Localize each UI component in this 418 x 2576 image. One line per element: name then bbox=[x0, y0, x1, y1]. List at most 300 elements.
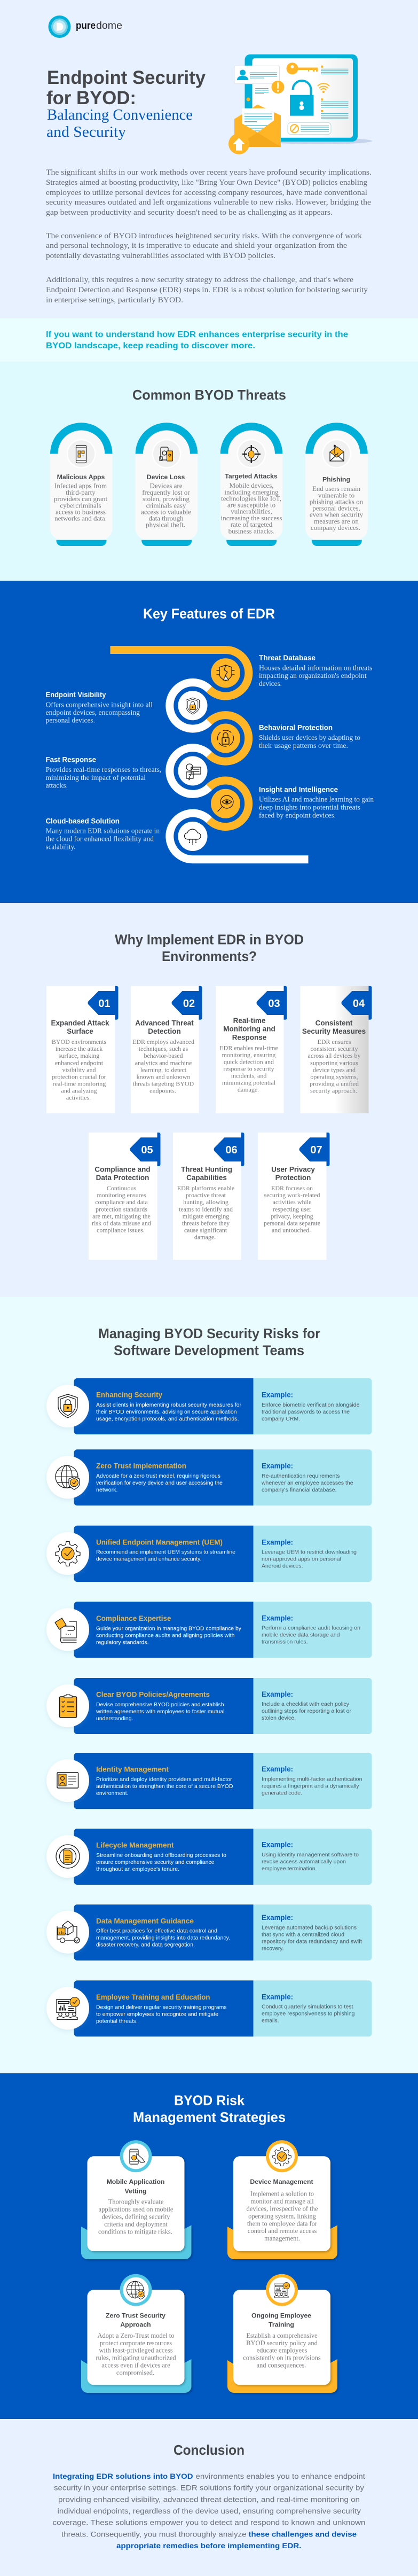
row: employee training and education: to empower employees to recognize and mitigate bbox=[96, 2011, 218, 2017]
card 05 bbox=[89, 1133, 160, 1260]
icon: response chat: ? bbox=[188, 774, 192, 779]
card: device loss: Devices are bbox=[149, 482, 183, 490]
icon: bug shield bbox=[211, 658, 240, 688]
card: device management: Implement a solution to bbox=[250, 2190, 314, 2197]
card 03: Real-time bbox=[233, 1017, 266, 1025]
heading: Managing BYOD Security Risks for bbox=[98, 1325, 320, 1341]
heading: Why Implement EDR in BYOD bbox=[115, 932, 304, 948]
intro paragraph 1: security measures outdated and left organizations vulnerable to new risks. However, bridging the bbox=[46, 198, 371, 207]
row: data management guidance: recovery. bbox=[262, 1946, 284, 1952]
feature: behavioral protection: Shields user devices by adapting to bbox=[259, 733, 360, 741]
card: phishing: even when security bbox=[310, 511, 364, 519]
feature: endpoint visibility: Endpoint Visibility bbox=[46, 690, 106, 699]
logo: puredome: pure bbox=[76, 20, 96, 32]
card 06: damage. bbox=[194, 1233, 216, 1240]
card 03 bbox=[216, 986, 287, 1113]
card 06: Capabilities bbox=[186, 1174, 227, 1182]
conclusion text: appropriate remedies before implementing EDR. bbox=[116, 2542, 301, 2550]
heading: Conclusion bbox=[173, 2442, 245, 2458]
card 04: Consistent bbox=[316, 1019, 353, 1027]
intro paragraph 1: The significant shifts in our work methods over recent years have profound security implications. bbox=[46, 168, 372, 177]
row: clear BYOD policies: Example: bbox=[262, 1690, 293, 1698]
row: employee training and education: emails. bbox=[262, 2017, 279, 2024]
card 01: surface, making bbox=[59, 1052, 99, 1059]
feature: behavioral protection bbox=[259, 723, 360, 750]
panel: key features of EDR bbox=[0, 581, 418, 903]
card 01: and analyzing bbox=[61, 1087, 97, 1095]
row: compliance expertise bbox=[46, 1602, 372, 1658]
card: zero trust security approach: with least-privileged access bbox=[99, 2347, 173, 2354]
feature: cloud-based solution: Many modern EDR solutions operate in bbox=[46, 827, 160, 835]
row: identity management: Example: bbox=[262, 1765, 293, 1773]
card 07: Protection bbox=[275, 1174, 311, 1182]
intro paragraph 1: Strategies aimed at boosting productivity, like "Bring Your Own Device" (BYOD) policies enabling bbox=[46, 178, 367, 187]
card: device loss: criminals easy bbox=[146, 501, 186, 509]
card: targeted attacks: increasing the success bbox=[221, 514, 282, 522]
row: compliance expertise: regulatory standards. bbox=[96, 1639, 148, 1645]
card: device management: Device Management bbox=[250, 2178, 313, 2185]
row: identity management: Identity Management bbox=[96, 1766, 169, 1774]
card: device management: monitor and manage all bbox=[250, 2197, 314, 2205]
heading bbox=[98, 1325, 320, 1359]
icon: cloud bbox=[178, 822, 207, 851]
row: zero trust implementation: company's financial database. bbox=[262, 1487, 336, 1493]
feature: threat database: Houses detailed information on threats bbox=[259, 663, 373, 672]
card 04: Security Measures bbox=[302, 1027, 366, 1035]
card 02: known and unknown bbox=[137, 1073, 190, 1080]
card 04: operating systems, bbox=[310, 1073, 358, 1080]
feature: cloud-based solution: Cloud-based Solution bbox=[46, 817, 120, 825]
card 01: activities. bbox=[66, 1094, 91, 1102]
card: phishing: End users remain bbox=[312, 485, 361, 493]
row: enhancing security: traditional passwords to access the bbox=[262, 1409, 350, 1415]
card: targeted attacks: Mobile devices, bbox=[229, 481, 274, 489]
row: lifecycle management: throughout an employee's tenure. bbox=[96, 1866, 179, 1872]
card: device loss: Device Loss bbox=[147, 473, 185, 481]
card: targeted attacks: rate of targeted bbox=[231, 520, 273, 528]
row: data management guidance: repository for data redundancy and swift bbox=[262, 1939, 362, 1945]
card 04: EDR ensures bbox=[317, 1038, 351, 1045]
card: mobile application vetting: applications used on mobile bbox=[99, 2206, 173, 2213]
card 03: Response bbox=[232, 1034, 267, 1042]
feature: threat database: impacting an organization's endpoint bbox=[259, 672, 367, 680]
row: unified endpoint management bbox=[46, 1526, 372, 1582]
icon: phone with hand bbox=[130, 2149, 145, 2164]
card: zero trust security approach: Approach bbox=[120, 2321, 151, 2329]
card 05: compliance and data bbox=[95, 1198, 148, 1206]
row: compliance expertise: Compliance Expertise bbox=[96, 1614, 171, 1622]
row: clear BYOD policies: stolen device. bbox=[262, 1715, 296, 1721]
row: compliance expertise: mobile device data storage and bbox=[262, 1632, 340, 1638]
heading: Common BYOD Threats bbox=[132, 387, 286, 403]
card: device loss bbox=[136, 423, 198, 546]
feature: threat database: Threat Database bbox=[259, 653, 316, 662]
panel: conclusion bbox=[0, 2419, 418, 2576]
row: enhancing security: company CRM. bbox=[262, 1416, 300, 1422]
panel: common BYOD threats bbox=[0, 362, 418, 581]
intro paragraph 2: The convenience of BYOD introduces heightened security risks. With the convergence of work bbox=[46, 232, 362, 240]
card 07: and untouched. bbox=[272, 1226, 311, 1234]
card 06: EDR platforms enable bbox=[177, 1184, 234, 1192]
card 02: 02 bbox=[183, 998, 195, 1010]
row: unified endpoint management: Unified Endpoint Management (UEM) bbox=[96, 1538, 223, 1546]
card 01: BYOD environments bbox=[52, 1038, 106, 1045]
card: zero trust security approach: rules, mitigating unauthorized bbox=[96, 2354, 176, 2362]
card: mobile application vetting: conditions to mitigate risks. bbox=[98, 2228, 172, 2235]
card: phishing: Phishing bbox=[322, 476, 350, 483]
row: clear BYOD policies: Clear BYOD Policies/Agreements bbox=[96, 1691, 210, 1699]
card 03: EDR enables real-time bbox=[219, 1044, 278, 1051]
row: employee training and education: potential threats. bbox=[96, 2018, 138, 2024]
card 01: 01 bbox=[98, 998, 111, 1010]
card 03: minimizing potential bbox=[222, 1079, 276, 1087]
card 05: protection standards bbox=[96, 1205, 147, 1213]
card 06: 06 bbox=[225, 1144, 238, 1156]
card: targeted attacks: technologies like IoT, bbox=[221, 494, 281, 502]
panel: callout band: BYOD landscape, keep reading to discover more. bbox=[46, 341, 255, 350]
card 06: Threat Hunting bbox=[181, 1165, 232, 1173]
card: device management: operating system, linking bbox=[248, 2212, 317, 2220]
row: identity management bbox=[46, 1753, 372, 1809]
feature: endpoint visibility bbox=[46, 690, 153, 724]
feature: insight and intelligence: deep insights into potential threats bbox=[259, 803, 360, 811]
heading bbox=[133, 2093, 286, 2125]
row: zero trust implementation: Zero Trust Implementation bbox=[96, 1462, 186, 1470]
card 02: behavior-based bbox=[144, 1052, 183, 1059]
row: enhancing security: Assist clients in implementing robust security measures for bbox=[96, 1402, 241, 1408]
feature: endpoint visibility: Offers comprehensive insight into all bbox=[46, 700, 153, 708]
card: device management: management. bbox=[264, 2235, 300, 2242]
card 04 bbox=[300, 986, 372, 1113]
row: lifecycle management: employee termination. bbox=[262, 1865, 317, 1872]
card 02: endpoints. bbox=[149, 1087, 176, 1095]
card: phishing: vulnerable to bbox=[318, 491, 354, 499]
row: identity management: environment. bbox=[96, 1790, 128, 1797]
intro paragraph 3: in enterprise settings, particularly BYOD. bbox=[46, 296, 183, 305]
card: device management: devices, irrespective of the bbox=[247, 2205, 318, 2212]
icon: shield lock bbox=[178, 691, 207, 720]
card: zero trust security approach bbox=[81, 2274, 191, 2393]
row: unified endpoint management: Leverage UEM to restrict downloading bbox=[262, 1549, 357, 1556]
row: compliance expertise: transmission rules. bbox=[262, 1638, 307, 1645]
conclusion text: providing enhanced visibility, advanced threat detection, and real-time monitoring on bbox=[58, 2495, 360, 2503]
feature: fast response: Fast Response bbox=[46, 755, 96, 764]
card 04: security approach. bbox=[310, 1087, 357, 1095]
row: unified endpoint management: Recommend and implement UEM systems to streamline bbox=[96, 1549, 235, 1556]
row: unified endpoint management: non-approved apps on personal bbox=[262, 1556, 341, 1563]
row: lifecycle management bbox=[46, 1829, 372, 1885]
card 04: providing a unified bbox=[310, 1080, 359, 1087]
panel: BYOD risk management strategies bbox=[0, 2073, 418, 2419]
title bbox=[46, 67, 206, 108]
row: data management guidance: Offer best practices for effective data control and bbox=[96, 1928, 217, 1934]
icon: response chat bbox=[178, 756, 207, 785]
row: data management guidance bbox=[46, 1904, 372, 1961]
card: targeted attacks: including emerging bbox=[224, 488, 279, 496]
card 04: supporting various bbox=[310, 1059, 358, 1066]
card 02 bbox=[131, 986, 202, 1113]
card 05: Compliance and bbox=[94, 1165, 151, 1173]
row: clear BYOD policies: outlining steps for reporting a lost or bbox=[262, 1708, 351, 1714]
card 01: protection crucial for bbox=[52, 1073, 106, 1080]
row: zero trust implementation: verification for every device and user accessing the bbox=[96, 1480, 223, 1486]
row: enhancing security: Enforce biometric verification alongside bbox=[262, 1402, 360, 1408]
card: ongoing employee training: consistently on its provisions bbox=[243, 2354, 321, 2362]
icon: lost devices bbox=[160, 447, 173, 461]
row: employee training and education: Example: bbox=[262, 1993, 293, 2001]
card 07: activities while bbox=[273, 1198, 311, 1206]
feature: fast response: minimizing the impact of potential bbox=[46, 774, 146, 782]
feature: cloud-based solution: scalability. bbox=[46, 842, 76, 850]
row: enhancing security: Example: bbox=[262, 1391, 293, 1399]
row: data management guidance: Leverage automated backup solutions bbox=[262, 1925, 357, 1931]
card: device loss: data through bbox=[148, 514, 184, 522]
card: malicious apps: cybercriminals bbox=[60, 501, 101, 509]
card: zero trust security approach: Adopt a Zero-Trust model to bbox=[98, 2332, 174, 2339]
card: ongoing employee training: BYOD security policy and bbox=[246, 2339, 318, 2347]
card: targeted attacks: vulnerabilities, bbox=[231, 508, 272, 516]
card 03: Monitoring and bbox=[223, 1025, 275, 1033]
conclusion text bbox=[52, 2472, 365, 2550]
illustration: tablet security with envelope bbox=[228, 54, 372, 154]
card 01: real-time monitoring bbox=[53, 1080, 106, 1087]
card 02: Advanced Threat bbox=[135, 1019, 194, 1027]
card 06: threats before they bbox=[182, 1219, 230, 1227]
card: mobile application vetting: Mobile Application bbox=[107, 2178, 164, 2185]
card: phishing: phishing attacks on bbox=[310, 497, 364, 505]
panel: why implement EDR bbox=[0, 903, 418, 1297]
icon: magnifier eye bbox=[211, 789, 240, 818]
card 04: 04 bbox=[353, 998, 365, 1010]
feature: insight and intelligence: Insight and Intelligence bbox=[259, 785, 338, 793]
card 04: consistent security bbox=[311, 1045, 358, 1052]
card: mobile application vetting: devices, defining security bbox=[101, 2213, 170, 2220]
row: clear BYOD policies: Devise comprehensive BYOD policies and establish bbox=[96, 1701, 224, 1708]
card: malicious apps: networks and data. bbox=[54, 514, 107, 522]
card: ongoing employee training: and consequences. bbox=[256, 2362, 306, 2369]
feature: fast response bbox=[46, 755, 161, 790]
icon: cycle lock bbox=[211, 723, 240, 753]
feature: cloud-based solution: the cloud for enhanced flexibility and bbox=[46, 834, 154, 842]
card 06: cause significant bbox=[184, 1226, 227, 1234]
row: employee training and education: Design and deliver regular security training programs bbox=[96, 2004, 226, 2010]
feature: insight and intelligence: faced by endpoint devices. bbox=[259, 811, 336, 819]
icon: crosshair target bbox=[242, 445, 261, 463]
feature: insight and intelligence bbox=[259, 785, 374, 819]
row: identity management: generated code. bbox=[262, 1790, 302, 1796]
card 07: securing work-related bbox=[264, 1191, 320, 1199]
card 03: 03 bbox=[268, 998, 280, 1010]
feature: fast response: attacks. bbox=[46, 782, 68, 790]
card: targeted attacks: Targeted Attacks bbox=[225, 473, 278, 480]
card: ongoing employee training: Establish a comprehensive bbox=[246, 2332, 318, 2339]
row: compliance expertise: conducting compliance audits and aligning policies with bbox=[96, 1632, 235, 1638]
card 05: Continuous bbox=[107, 1184, 137, 1192]
panel: callout band bbox=[0, 318, 418, 362]
row: lifecycle management: ensure comprehensive security and compliance bbox=[96, 1859, 215, 1865]
row: identity management: Prioritize and deploy identity providers and multi-factor bbox=[96, 1776, 232, 1783]
title: for BYOD: bbox=[46, 88, 136, 108]
heading: Environments? bbox=[162, 948, 257, 964]
row: lifecycle management: revoke access automatically upon bbox=[262, 1859, 346, 1865]
card 07: respecting user bbox=[273, 1205, 311, 1213]
card 04: device types and bbox=[313, 1066, 356, 1073]
intro paragraph 2 bbox=[46, 232, 362, 260]
card: device loss: stolen, providing bbox=[143, 495, 190, 503]
card 02: techniques, such as bbox=[139, 1045, 188, 1052]
row: enhancing security: Enhancing Security bbox=[96, 1391, 162, 1399]
feature: cloud-based solution bbox=[46, 817, 160, 850]
intro paragraph 1 bbox=[46, 168, 372, 217]
card 02: Detection bbox=[148, 1027, 181, 1035]
card 03: damage. bbox=[238, 1086, 259, 1094]
row: zero trust implementation: Re-authentication requirements bbox=[262, 1473, 340, 1479]
card 07: personal data separate bbox=[264, 1219, 320, 1227]
row: data management guidance: that sync with a centralized cloud bbox=[262, 1932, 344, 1938]
card: zero trust security approach: Zero Trust Security bbox=[106, 2312, 165, 2319]
intro paragraph 3: Endpoint Detection and Response (EDR) steps in. EDR is a robust solution for bolstering security bbox=[46, 286, 368, 294]
row: zero trust implementation: Advocate for a zero trust model, requiring rigorous bbox=[96, 1473, 220, 1479]
card 05: are met, mitigating the bbox=[92, 1212, 151, 1220]
subtitle: and Security bbox=[46, 124, 127, 140]
row: compliance expertise: Guide your organization in managing BYOD compliance by bbox=[96, 1625, 242, 1632]
card: mobile application vetting: criteria and deployment bbox=[104, 2220, 168, 2228]
row: compliance expertise: Example: bbox=[262, 1614, 293, 1622]
conclusion text: coverage. These solutions empower you to detect and respond to known and unknown bbox=[52, 2519, 365, 2527]
card: targeted attacks: business attacks. bbox=[228, 527, 274, 535]
heading: Key Features of EDR bbox=[143, 606, 275, 622]
card 05: compliance issues. bbox=[97, 1226, 145, 1234]
icon: phone with apps bbox=[76, 446, 86, 463]
card: malicious apps: Infected apps from bbox=[54, 482, 107, 490]
card: mobile application vetting: Thoroughly evaluate bbox=[108, 2198, 164, 2206]
card: ongoing employee training: educate employees bbox=[257, 2347, 307, 2354]
logo: puredome: dome bbox=[96, 20, 122, 32]
panel: managing BYOD security risks bbox=[0, 1297, 418, 2073]
subtitle bbox=[46, 107, 193, 140]
card 03: incidents, and bbox=[231, 1072, 266, 1080]
heading: Management Strategies bbox=[133, 2109, 286, 2125]
conclusion text: individual endpoints, regardless of the device used, ensuring comprehensive security bbox=[58, 2507, 361, 2515]
card 07: privacy, keeping bbox=[271, 1212, 313, 1220]
card 05: monitoring ensures bbox=[97, 1191, 146, 1199]
row: clear BYOD policies: understanding. bbox=[96, 1715, 133, 1722]
row: enhancing security bbox=[46, 1378, 372, 1434]
card 01: Expanded Attack bbox=[51, 1019, 109, 1027]
row: enhancing security: usage, encryption protocols, and authentication methods. bbox=[96, 1416, 239, 1422]
card: targeted attacks: are susceptible to bbox=[227, 501, 275, 509]
row: clear BYOD policies bbox=[46, 1678, 372, 1734]
icon: clipboard bbox=[60, 1695, 77, 1718]
card 01 bbox=[46, 986, 119, 1113]
row: lifecycle management: Using identity management software to bbox=[262, 1852, 359, 1858]
card: device management bbox=[227, 2140, 337, 2259]
card 05: Data Protection bbox=[96, 1174, 149, 1182]
card: mobile application vetting: Vetting bbox=[125, 2187, 146, 2195]
row: identity management: Implementing multi-factor authentication bbox=[262, 1776, 362, 1782]
row: identity management: requires a fingerprint and a dynamically bbox=[262, 1783, 359, 1789]
card: zero trust security approach: access even if devices are bbox=[101, 2362, 170, 2369]
card 06: proactive threat bbox=[186, 1191, 226, 1199]
card 01: increase the attack bbox=[56, 1045, 102, 1052]
feature: threat database: devices. bbox=[259, 680, 282, 688]
feature: behavioral protection: their usage patterns over time. bbox=[259, 741, 348, 750]
row: lifecycle management: Lifecycle Management bbox=[96, 1841, 174, 1849]
icon: gavel and book bbox=[55, 1618, 76, 1643]
feature: insight and intelligence: Utilizes AI and machine learning to gain bbox=[259, 795, 374, 803]
card: device loss: physical theft. bbox=[146, 521, 185, 529]
icon: phishing envelope bbox=[330, 445, 344, 461]
conclusion text: security in your enterprise settings. EDR solutions fortify your organizational security by bbox=[54, 2484, 364, 2492]
row: employee training and education: Employee Training and Education bbox=[96, 1993, 210, 2001]
icon: id card bbox=[57, 1773, 78, 1788]
row: lifecycle management: Example: bbox=[262, 1841, 293, 1849]
row: unified endpoint management: device management and enhance security. bbox=[96, 1556, 202, 1563]
card 04: across all devices by bbox=[308, 1052, 360, 1059]
card 05: risk of data misuse and bbox=[92, 1219, 151, 1227]
intro paragraph 3 bbox=[46, 276, 368, 305]
card 02: EDR employs advanced bbox=[132, 1038, 194, 1045]
card: malicious apps: third-party bbox=[66, 488, 96, 496]
row: data management guidance: Example: bbox=[262, 1914, 293, 1922]
title: Endpoint Security bbox=[47, 67, 206, 88]
card 03: quick detection and bbox=[224, 1058, 274, 1065]
card: malicious apps: Malicious Apps bbox=[57, 473, 105, 481]
logo: puredome bbox=[48, 15, 122, 38]
row: employee training and education: employee responsiveness to phishing bbox=[262, 2010, 355, 2017]
card 07: 07 bbox=[310, 1144, 322, 1156]
heading: BYOD Risk bbox=[174, 2093, 245, 2109]
row: zero trust implementation: whenever an employee accesses the bbox=[261, 1480, 353, 1486]
row: employee training and education bbox=[46, 1980, 372, 2036]
card: ongoing employee training bbox=[227, 2274, 337, 2393]
row: zero trust implementation: network. bbox=[96, 1487, 117, 1493]
card: zero trust security approach: compromised. bbox=[116, 2369, 154, 2376]
row: data management guidance: Data Management Guidance bbox=[96, 1917, 194, 1925]
card: phishing bbox=[305, 423, 368, 546]
card 03: monitoring, ensuring bbox=[222, 1051, 275, 1058]
card 06: teams to identify and bbox=[179, 1205, 233, 1213]
heading bbox=[115, 932, 304, 964]
row: data management guidance: disaster recovery, and data segregation. bbox=[96, 1942, 195, 1948]
card 01: enhanced endpoint bbox=[55, 1059, 104, 1066]
card: device loss: access to valuable bbox=[141, 508, 191, 516]
conclusion text: these challenges and devise bbox=[249, 2530, 357, 2538]
panel: callout band: If you want to understand how EDR enhances enterprise security in the bbox=[46, 330, 348, 339]
card 06: hunting, allowing bbox=[183, 1198, 228, 1206]
card 06 bbox=[173, 1133, 245, 1260]
card: phishing: measures are on bbox=[314, 517, 359, 525]
row: unified endpoint management: Example: bbox=[262, 1538, 293, 1546]
card: mobile application vetting bbox=[81, 2140, 191, 2259]
row: employee training and education: Conduct quarterly simulations to test bbox=[262, 2003, 353, 2010]
card 02: threats targeting BYOD bbox=[133, 1080, 194, 1087]
card: malicious apps bbox=[50, 423, 112, 546]
card 03: response to security bbox=[223, 1065, 274, 1073]
conclusion text: threats. Consequently, you must thoroughly analyze bbox=[61, 2530, 247, 2538]
card 07 bbox=[258, 1133, 330, 1260]
conclusion text: Integrating EDR solutions into BYOD bbox=[53, 2472, 193, 2480]
intro paragraph 1: gap between productivity and security doesn't need to be as challenging as it appears. bbox=[46, 208, 333, 217]
conclusion text: environments enables you to enhance endpoint bbox=[195, 2472, 365, 2480]
card: malicious apps: access to business bbox=[56, 508, 106, 516]
icon: data cube flow bbox=[57, 1921, 80, 1943]
row: compliance expertise: Perform a compliance audit focusing on bbox=[262, 1625, 360, 1631]
card: targeted attacks bbox=[220, 423, 282, 546]
card 01: visibility and bbox=[62, 1066, 96, 1073]
card: phishing: personal devices, bbox=[312, 504, 360, 512]
card 06: mitigate emerging bbox=[183, 1212, 229, 1220]
